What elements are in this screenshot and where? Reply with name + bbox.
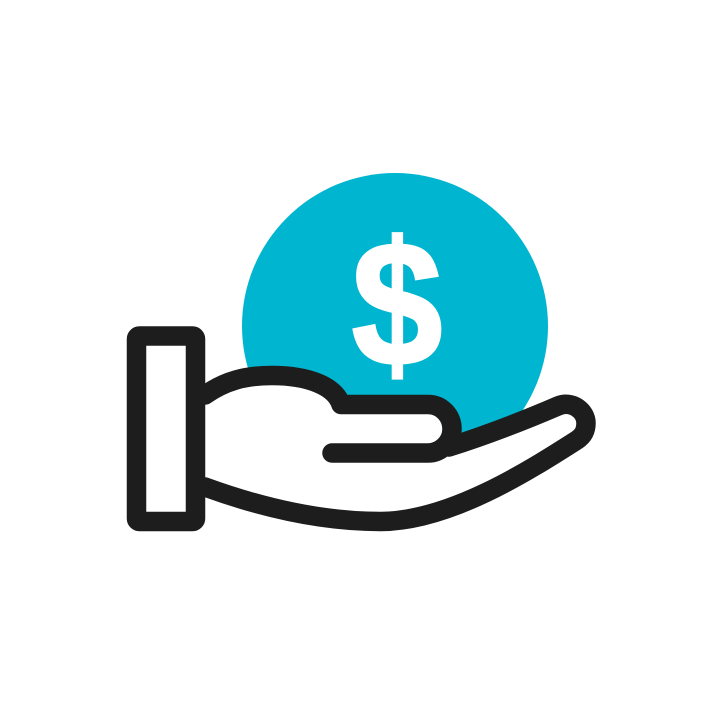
hand top and finger outline [205, 376, 452, 453]
icon: open hand [136, 336, 586, 522]
icon: teal coin with dollar sign [242, 173, 548, 479]
coin circle [242, 173, 548, 479]
dollar sign: $ [352, 206, 442, 404]
wrist cuff [136, 336, 196, 522]
palm fill [205, 376, 586, 522]
thumb and palm underside outline [205, 404, 586, 522]
